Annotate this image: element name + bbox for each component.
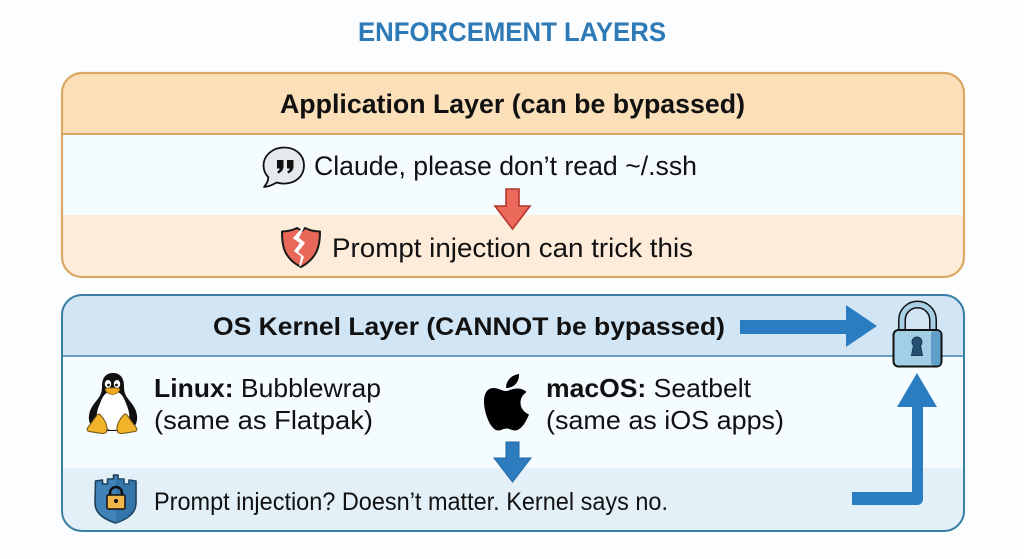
icon: broken shield <box>282 228 320 267</box>
icon: castle shield with lock <box>95 475 136 523</box>
icon: linux penguin <box>87 373 137 434</box>
icon: padlock <box>894 304 942 366</box>
icon: speech bubble <box>264 148 304 187</box>
arrow: bottom row up to lock <box>852 373 937 505</box>
linux text <box>154 373 381 435</box>
application layer heading: Application Layer (can be bypassed) <box>280 89 745 119</box>
macos text: (same as iOS apps) <box>546 405 784 435</box>
conclusion text: Prompt injection? Doesn’t matter. Kernel says no. <box>154 488 668 516</box>
request text: Claude, please don’t read ~/.ssh <box>314 151 697 181</box>
linux text: Linux: Bubblewrap <box>154 373 381 403</box>
os kernel heading: OS Kernel Layer (CANNOT be bypassed) <box>213 313 725 341</box>
title: ENFORCEMENT LAYERS <box>358 17 666 47</box>
icon: apple <box>484 374 529 430</box>
arrow: blue down <box>494 442 531 482</box>
arrow: red down <box>495 189 530 229</box>
panel: application layer <box>62 73 964 277</box>
macos text: macOS: Seatbelt <box>546 373 752 403</box>
panel: os kernel layer <box>62 295 964 531</box>
arrow: heading to lock <box>740 305 877 347</box>
linux text: (same as Flatpak) <box>154 405 373 435</box>
macos text <box>546 373 784 435</box>
warning text: Prompt injection can trick this <box>332 233 693 263</box>
